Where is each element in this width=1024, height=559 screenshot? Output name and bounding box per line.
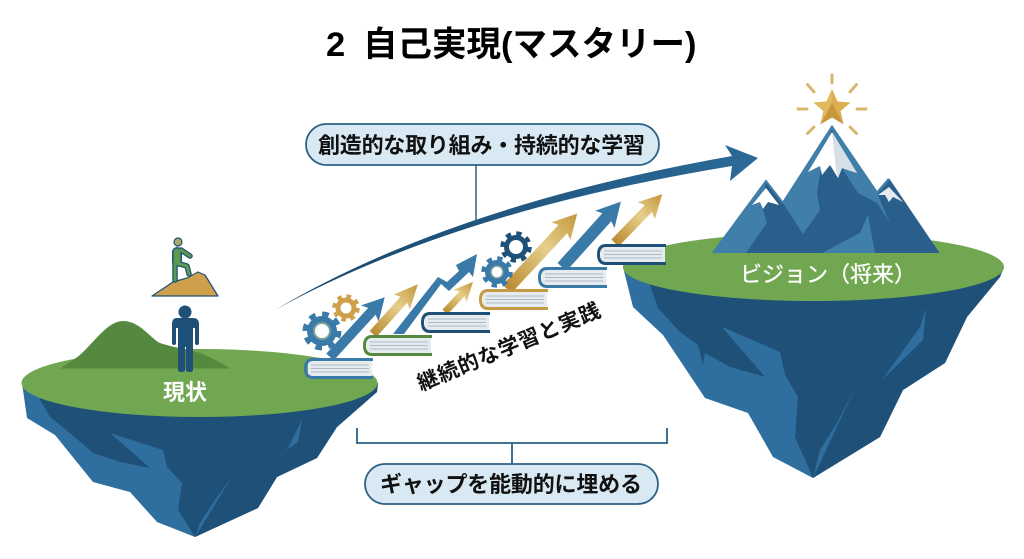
arrow 2 (365, 277, 426, 341)
book 3 (422, 314, 490, 332)
book 4 (480, 290, 548, 308)
right floating island: vision (623, 127, 1004, 478)
curved arrow toward the vision (275, 145, 758, 310)
bracket: the gap (357, 428, 667, 464)
rising arrows (321, 186, 671, 365)
label: current state: 現状 (163, 380, 207, 405)
island rock (22, 383, 378, 537)
gear dark (502, 234, 530, 260)
label: actively close the gap: ギャップを能動的に埋める (380, 472, 642, 497)
arrow 1 (321, 289, 394, 365)
island grass top (623, 233, 1004, 301)
arrow 3 zigzag (393, 254, 477, 334)
person icon (172, 306, 199, 372)
snow caps (752, 132, 903, 209)
arrow 4 (438, 276, 480, 318)
book stairs (306, 246, 666, 378)
left floating island: current state (22, 306, 378, 537)
icon: hiker on a mound (152, 238, 218, 296)
arrow 6 (552, 193, 631, 276)
label: vision: ビジョン（将来） (740, 262, 916, 287)
label: creative efforts and continuous learning (306, 124, 659, 165)
label: creative efforts and continuous learning: 創造的な取り組み・持続的な学習 (318, 133, 645, 158)
mountains (713, 127, 939, 253)
book 5 (540, 268, 607, 286)
title: 自己実現(マスタリー) (363, 26, 696, 64)
gear gold (334, 296, 358, 320)
gear blue small (484, 258, 510, 286)
arrow 7 (606, 186, 671, 251)
island grass top (22, 349, 378, 417)
arrow 5 (497, 205, 587, 298)
island rock (623, 267, 1004, 478)
icon: star with rays (798, 75, 866, 134)
gear blue large (306, 314, 338, 348)
icon: gears (306, 234, 530, 348)
label: actively close the gap (365, 464, 658, 504)
book 1 (306, 360, 373, 378)
diagonal label: continuous learning and practice: 継続的な学習と実践 (414, 299, 604, 396)
book 6 (598, 246, 666, 264)
green hill (60, 321, 230, 368)
title: 2 (326, 26, 345, 64)
connector: top label to curve (475, 165, 477, 222)
book 2 (364, 336, 432, 354)
